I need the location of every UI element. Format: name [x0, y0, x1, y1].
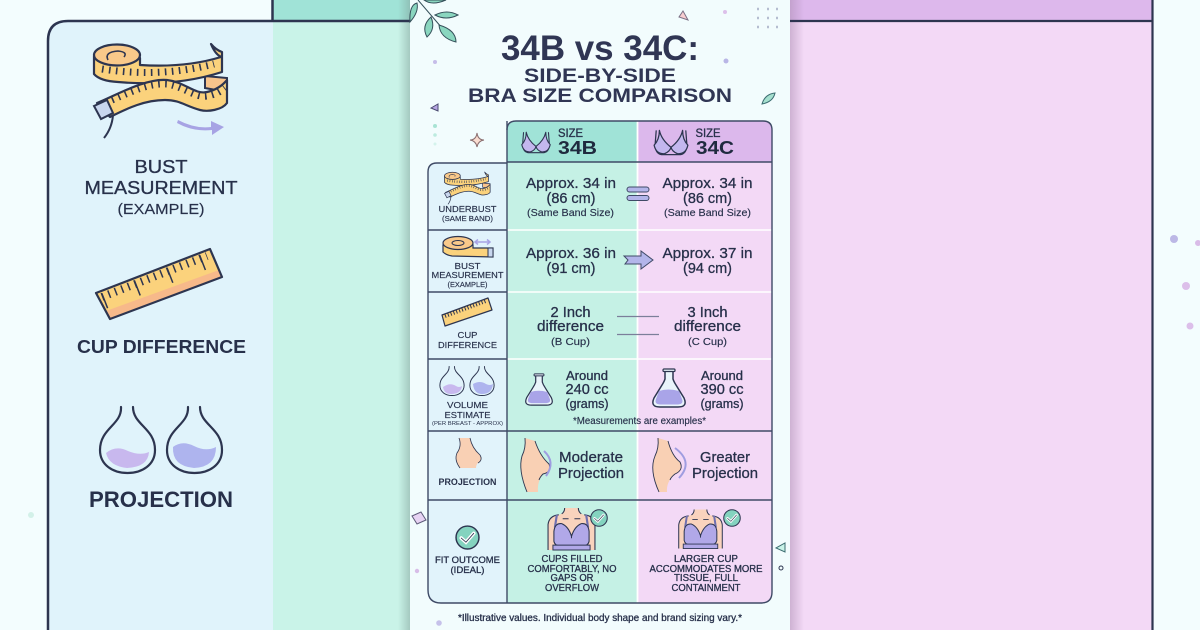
note: grams: (grams) [566, 396, 608, 411]
icon: 34B check [591, 510, 607, 526]
row: underbust [438, 172, 752, 223]
value: 2 inch: 2 Inch [550, 304, 590, 321]
value: around: Around [701, 369, 743, 383]
label: fit outcome: FIT OUTCOME [435, 555, 500, 566]
icon: leaf branch [410, 0, 458, 42]
text: measurement: MEASUREMENT [84, 178, 238, 198]
note: 34C same band: (Same Band Size) [664, 207, 751, 219]
text: 34C fit line 1: LARGER CUP [674, 554, 738, 565]
icon: large ruler [96, 249, 222, 319]
comparison table [428, 121, 772, 603]
text: bust measurement: BUST [134, 157, 188, 177]
text: moderate: Moderate [559, 449, 623, 466]
title line three: BRA SIZE COMPARISON [468, 86, 732, 107]
icon: small flask [526, 374, 552, 405]
text: 34B: 34B [558, 137, 597, 158]
text: 34C fit line 3: TISSUE, FULL [674, 573, 739, 584]
row: fit outcome [435, 508, 763, 594]
label: difference: DIFFERENCE [438, 340, 497, 350]
text: 34B fit line 4: OVERFLOW [545, 583, 600, 594]
note: grams: (grams) [700, 396, 744, 411]
title line two: SIDE-BY-SIDE [524, 66, 676, 87]
icon: 34C fit figure [679, 510, 722, 549]
icon: check badge [456, 526, 479, 549]
panel: right blurred background [790, 0, 1152, 630]
icon: volume flasks [100, 407, 222, 473]
text: projection: PROJECTION [89, 487, 233, 512]
value: 34C bust cm: (94 cm) [683, 260, 732, 277]
label: bust: BUST [454, 261, 481, 271]
icon: small tape measure [445, 172, 490, 204]
label: measurement: MEASUREMENT [432, 270, 504, 280]
footnote: *Illustrative values. Individual body shape and brand sizing vary.* [458, 613, 742, 624]
text: size: SIZE [558, 128, 583, 140]
icon: small tape roll [443, 236, 493, 257]
icon: 34B fit figure [548, 508, 595, 550]
label: cup: CUP [458, 330, 478, 340]
icon: greater torso [653, 438, 686, 492]
value: 34C bust: Approx. 37 in [662, 245, 752, 262]
label: underbust: UNDERBUST [438, 204, 497, 214]
value: 34C cm: (86 cm) [683, 190, 732, 207]
icon: right arrow [624, 251, 653, 269]
value: difference: difference [674, 318, 741, 335]
text: 34B fit line 3: GAPS OR [550, 573, 594, 584]
text: cup difference: CUP DIFFERENCE [77, 336, 246, 357]
note: B cup: (B Cup) [551, 336, 590, 348]
text: projection: Projection [558, 465, 624, 482]
label: example: (EXAMPLE) [448, 282, 488, 289]
label: same band: (SAME BAND) [442, 214, 493, 223]
text: 34C fit line 4: CONTAINMENT [672, 583, 741, 594]
icon: small volume flasks [440, 366, 494, 396]
label: estimate: ESTIMATE [444, 410, 491, 420]
text: 34B fit line 2: COMFORTABLY, NO [528, 564, 617, 575]
icon: bra 34B [522, 132, 550, 153]
icon: moderate torso [521, 438, 551, 492]
label: projection: PROJECTION [438, 477, 496, 487]
icon: small ruler [442, 298, 492, 326]
column header: 34B [522, 128, 597, 158]
text: 34C: 34C [696, 137, 734, 158]
value: 34C underbust: Approx. 34 in [662, 175, 752, 192]
icon: bra 34C [654, 130, 688, 155]
note: 34B same band: (Same Band Size) [527, 207, 614, 219]
text: greater: Greater [700, 449, 750, 466]
column header: 34C [654, 128, 734, 158]
icon: equals sign [627, 187, 649, 200]
value: 3 inch: 3 Inch [688, 304, 728, 321]
value: around: Around [566, 369, 608, 383]
title line one: 34B vs 34C: [501, 29, 699, 68]
row: projection [438, 438, 758, 492]
value: 390 cc: 390 cc [700, 382, 744, 398]
text: example: (EXAMPLE) [118, 201, 204, 218]
label: ideal: (IDEAL) [450, 565, 484, 576]
text: 34B fit line 1: CUPS FILLED [542, 554, 602, 565]
text: size: SIZE [696, 128, 721, 140]
note: measurements are examples: *Measurements are examples* [573, 416, 706, 427]
value: difference: difference [537, 318, 604, 335]
value: 34B bust cm: (91 cm) [546, 260, 596, 277]
panel: central card [410, 0, 790, 630]
icon: small torso [456, 438, 481, 468]
panel: left blurred background table [48, 0, 410, 630]
value: 34B underbust: Approx. 34 in [526, 175, 616, 192]
row: volume estimate [432, 366, 744, 427]
row: bust measurement [432, 236, 752, 289]
title [468, 29, 732, 107]
text: 34C fit line 2: ACCOMMODATES MORE [650, 564, 763, 575]
connector lines [617, 316, 659, 334]
row: cup difference [438, 298, 741, 350]
label: per breast: (PER BREAST - APPROX) [432, 421, 503, 427]
value: 34B bust: Approx. 36 in [526, 245, 616, 262]
text: projection: Projection [692, 465, 758, 482]
value: 240 cc: 240 cc [566, 382, 608, 398]
icon: purple arrow [177, 120, 224, 135]
label: volume: VOLUME [447, 400, 488, 410]
value: 34B cm: (86 cm) [546, 190, 596, 207]
icon: large flask [653, 369, 685, 407]
note: C cup: (C Cup) [688, 336, 727, 348]
table cell backgrounds [428, 121, 772, 603]
icon: 34C check [724, 510, 740, 526]
icon: large tape measure [94, 44, 227, 138]
